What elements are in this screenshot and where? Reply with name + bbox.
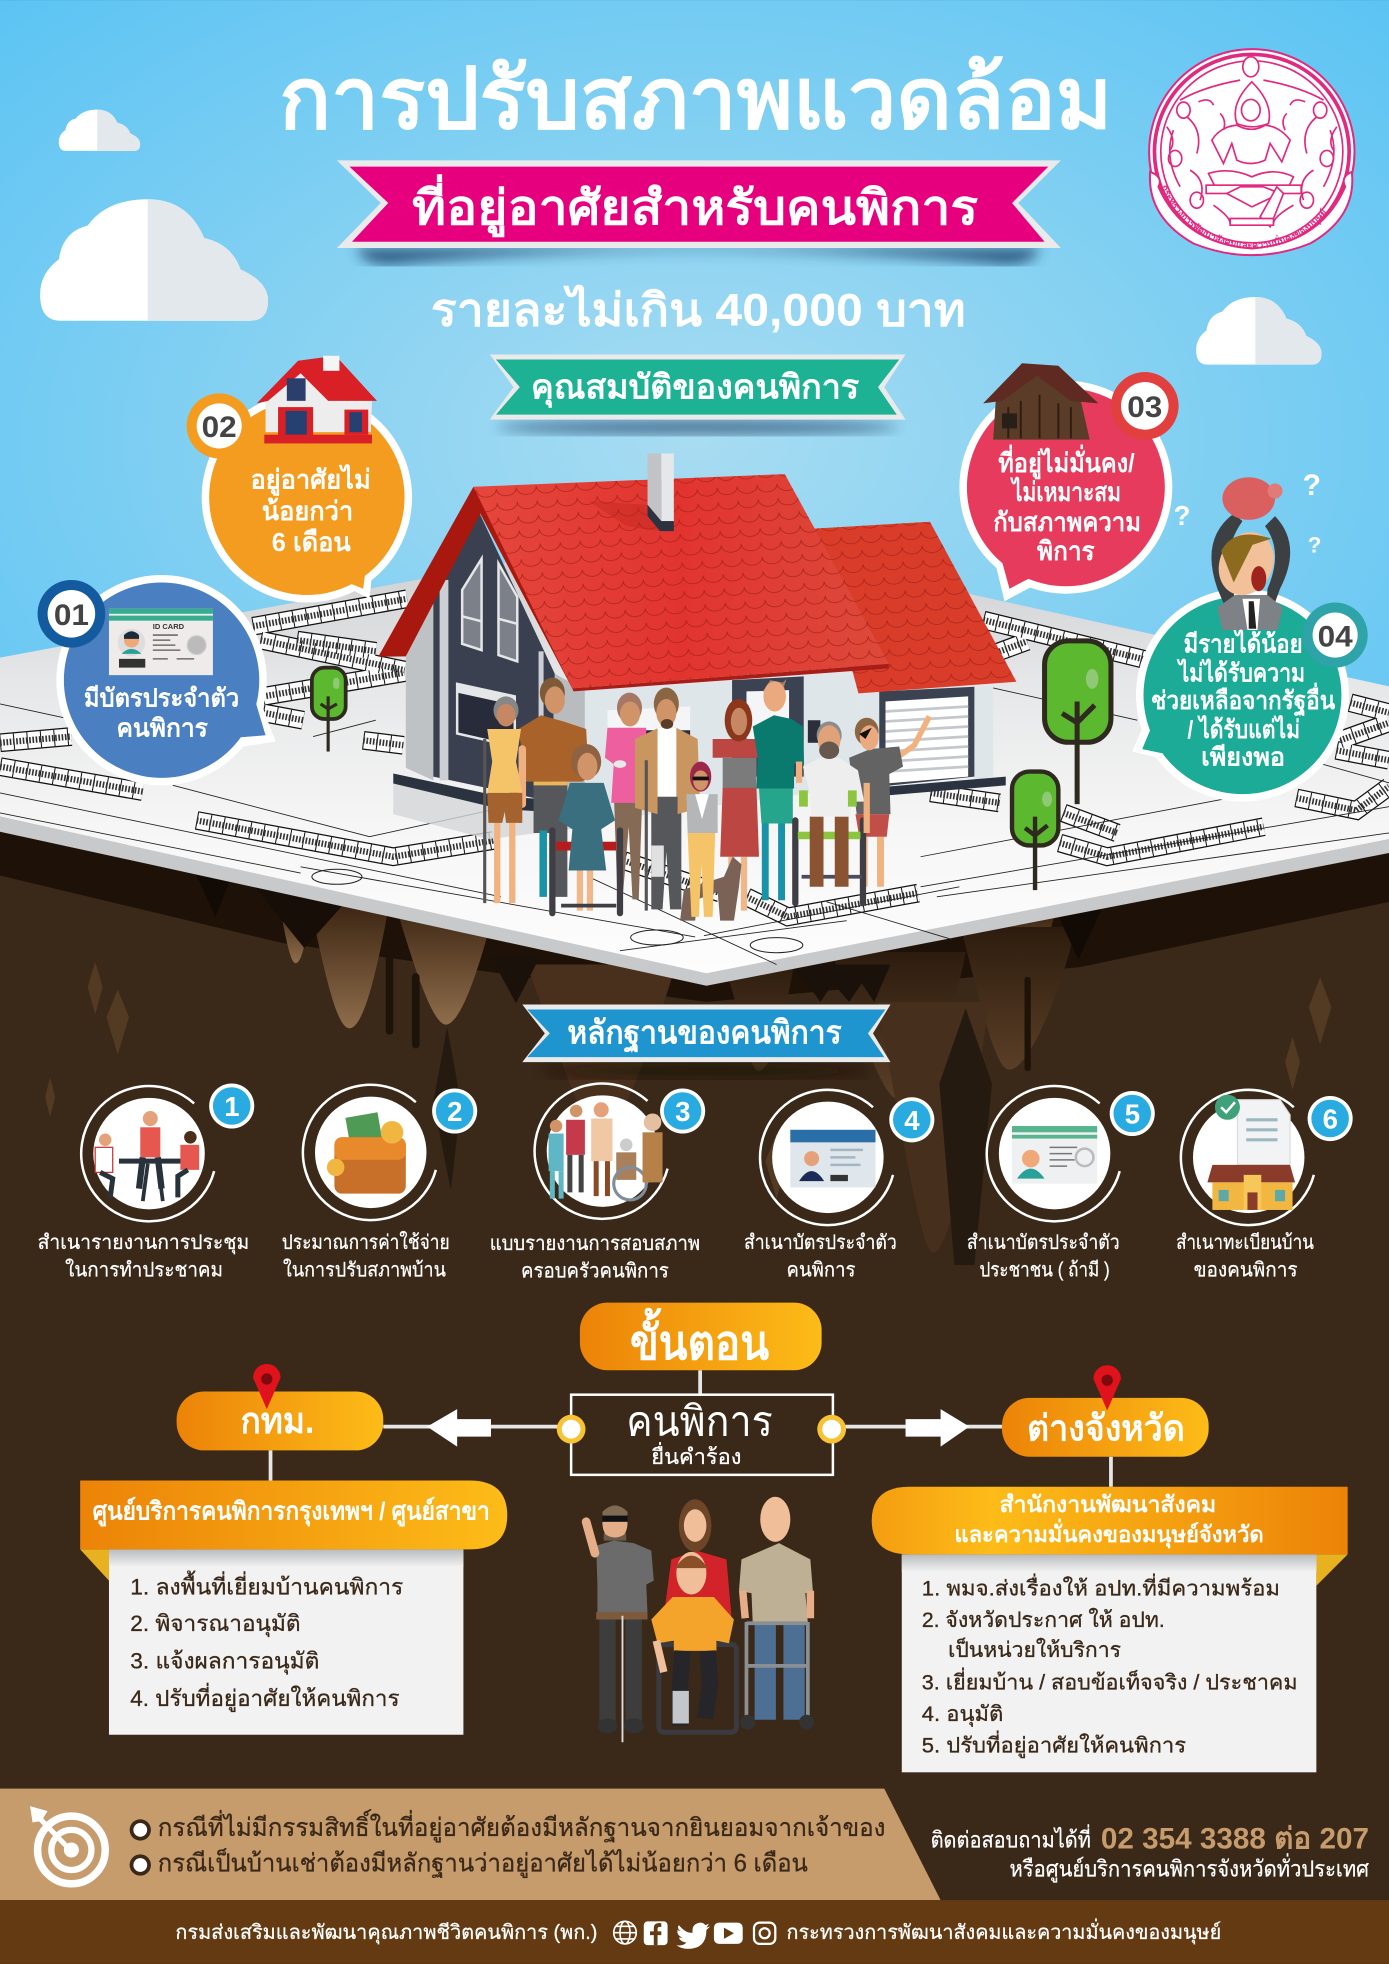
cloud right — [1196, 297, 1321, 365]
old man with walker — [739, 1497, 814, 1730]
cloud large left — [40, 199, 268, 321]
group of people with disabilities — [485, 678, 929, 921]
panel: provinces steps: 2. จังหวัดประกาศ ให้ อปท. — [922, 1608, 1165, 1632]
blueprint plate — [0, 526, 1389, 986]
evidence 1: สำเนารายงานการประชุม — [38, 1232, 249, 1255]
icon: house registration — [1207, 1095, 1295, 1210]
bubble 03 — [959, 363, 1179, 601]
box: person with disability applies: คนพิการ — [626, 1398, 773, 1444]
panel: Bangkok steps: 3. แจ้งผลการอนุมัติ — [130, 1648, 319, 1674]
bubble 01 — [38, 575, 276, 785]
badge 2 — [432, 1088, 477, 1134]
evidence 4: คนพิการ — [787, 1259, 856, 1281]
icon: twitter — [676, 1923, 710, 1949]
panel: provinces steps: 5. ปรับที่อยู่อาศัยให้คนพิการ — [922, 1730, 1186, 1758]
bubble 01: คนพิการ — [116, 715, 208, 743]
badge 03 — [1111, 372, 1179, 440]
pill: Bangkok — [177, 1392, 383, 1450]
house shadow on plate — [393, 783, 589, 839]
icon: family with disabilities — [549, 1102, 663, 1200]
tree large — [1045, 641, 1111, 804]
pill: provinces: ต่างจังหวัด — [1027, 1407, 1185, 1448]
pill: Bangkok: กทม. — [240, 1400, 314, 1441]
icon: pin right — [1093, 1365, 1121, 1410]
panel: provinces steps: 3. เยี่ยมบ้าน / สอบข้อเท็จจริง / ประชาคม — [922, 1668, 1298, 1695]
gable windows — [462, 559, 482, 650]
arrow left — [427, 1409, 491, 1447]
evidence 6 — [1176, 1090, 1353, 1281]
person 9 wheelchair — [795, 721, 868, 903]
badge 3 — [660, 1088, 705, 1134]
woman — [664, 1499, 731, 1616]
trees — [312, 641, 1111, 890]
ribbon: qualifications — [490, 355, 906, 435]
left gray wall — [406, 600, 435, 780]
evidence 3: ครอบครัวคนพิการ — [521, 1261, 669, 1283]
underground background — [0, 802, 1389, 1804]
panel: provinces steps: 1. พมจ.ส่งเรื่องให้ อปท.ที่มีความพร้อม — [922, 1574, 1280, 1601]
icon: wallet — [327, 1112, 406, 1194]
boy in wheelchair — [651, 1552, 736, 1732]
bubble 04: / ได้รับแต่ไม่ — [1187, 714, 1300, 744]
badge 3: 3 — [675, 1096, 690, 1127]
cloud small left — [59, 110, 140, 151]
ribbon: pink subtitle — [337, 160, 1061, 264]
panel: Bangkok steps: 2. พิจารณาอนุมัติ — [130, 1611, 301, 1637]
panel: Bangkok steps — [80, 1480, 507, 1735]
badge 2: 2 — [447, 1096, 462, 1127]
panel: provinces steps: เป็นหน่วยให้บริการ — [948, 1635, 1121, 1662]
badge 5: 5 — [1125, 1099, 1140, 1130]
person 5 tan jacket — [635, 688, 700, 911]
connector lines — [271, 1370, 1111, 1487]
person 3 wheelchair woman — [552, 744, 620, 913]
bubble 04 — [1132, 469, 1368, 802]
evidence 4 — [744, 1090, 934, 1281]
evidence 3 — [490, 1084, 705, 1283]
ministry seal — [1148, 48, 1356, 256]
badge 01: 01 — [54, 599, 89, 632]
evidence 2 — [282, 1085, 477, 1281]
ribbon: pink subtitle: ที่อยู่อาศัยสำหรับคนพิการ — [412, 174, 979, 238]
badge 4 — [889, 1097, 934, 1142]
pill: provinces — [1002, 1398, 1209, 1457]
bubble 03: ที่อยู่ไม่มั่นคง/ — [998, 444, 1135, 480]
panel: Bangkok steps: ศูนย์บริการคนพิการกรุงเทพฯ / ศูนย์สาขา — [93, 1496, 490, 1527]
person 8 teal — [753, 679, 804, 900]
panel: provinces steps: สำนักงานพัฒนาสังคม — [999, 1492, 1216, 1517]
bubble 02: 6 เดือน — [272, 527, 351, 557]
ribbon: qualifications: คุณสมบัติของคนพิการ — [531, 368, 859, 408]
decorative diamonds — [45, 962, 1331, 1199]
evidence 2: ในการปรับสภาพบ้าน — [283, 1258, 446, 1281]
badge 6 — [1308, 1096, 1353, 1141]
footer note panel: กรณีที่ไม่มีกรรมสิทธิ์ในที่อยู่อาศัยต้องมีหลักฐานจากยินยอมจากเจ้าของ — [158, 1809, 886, 1843]
badge 1 — [209, 1083, 254, 1129]
evidence 3: แบบรายงานการสอบสภาพ — [490, 1233, 700, 1255]
evidence 6: ของคนพิการ — [1194, 1259, 1298, 1281]
evidence 5: ประชาชน ( ถ้ามี ) — [979, 1259, 1110, 1281]
ribbon: evidence: หลักฐานของคนพิการ — [567, 1014, 842, 1053]
heading: steps: ขั้นตอน — [630, 1307, 769, 1370]
box: person with disability applies: ยื่นคำร้อง — [651, 1442, 741, 1469]
front wall — [585, 673, 858, 823]
badge 04 — [1303, 602, 1368, 668]
ribbon: evidence — [522, 1005, 891, 1078]
base — [393, 773, 589, 814]
evidence 5: สำเนาบัตรประจำตัว — [967, 1232, 1120, 1254]
arrow right — [906, 1409, 969, 1447]
panel: provinces steps: 4. อนุมัติ — [922, 1702, 1003, 1727]
person 1 crutches — [485, 696, 522, 903]
tree small — [312, 668, 346, 752]
person 2 brown shirt — [519, 678, 589, 897]
badge 02 — [187, 393, 252, 458]
contact — [931, 1823, 1370, 1882]
evidence 4: สำเนาบัตรประจำตัว — [744, 1232, 897, 1254]
gable dark wall — [433, 514, 555, 802]
main roof gable edge — [378, 487, 579, 688]
icon: id card — [1012, 1126, 1097, 1184]
ministry seal: กระทรวงการพัฒนาสังคมและความมั่นคงของมนุษย์ — [1162, 186, 1326, 249]
chimney — [648, 453, 661, 521]
badge 04: 04 — [1318, 620, 1353, 653]
evidence 1 — [38, 1083, 254, 1281]
badge 02: 02 — [202, 411, 237, 444]
icon: www — [614, 1921, 636, 1944]
panel: Bangkok steps: 4. ปรับที่อยู่อาศัยให้คนพิการ — [130, 1682, 400, 1712]
badge 03: 03 — [1127, 391, 1162, 424]
badge 1: 1 — [224, 1091, 240, 1122]
title: การปรับสภาพแวดล้อม — [279, 52, 1112, 147]
icon: man with piggy bank: ? — [1308, 532, 1321, 557]
icon: disability card — [790, 1130, 875, 1187]
badge 5 — [1110, 1091, 1155, 1136]
icon: old wooden house — [983, 363, 1098, 440]
subtitle amount: รายละไม่เกิน 40,000 บาท — [431, 284, 966, 336]
bubble 02: อยู่อาศัยไม่ — [250, 464, 371, 497]
icon: facebook — [644, 1921, 668, 1945]
right wing roof — [814, 522, 1016, 693]
badge 01 — [38, 580, 105, 648]
person 7 red dress — [713, 699, 759, 911]
bubble 04: เพียงพอ — [1201, 743, 1285, 771]
evidence 6: สำเนาทะเบียนบ้าน — [1176, 1232, 1314, 1254]
icon: man with piggy bank — [1174, 469, 1321, 630]
bubble 04: ไม่ได้รับความ — [1176, 657, 1305, 687]
stalactites — [194, 871, 1102, 1265]
bubble 02: น้อยกว่า — [262, 496, 353, 526]
icon: target — [30, 1806, 105, 1884]
icon: youtube — [714, 1923, 743, 1944]
icon: instagram — [754, 1923, 775, 1944]
footer bar: กรมส่งเสริมและพัฒนาคุณภาพชีวิตคนพิการ (พก.) — [175, 1922, 597, 1945]
person 6 blind woman with guide dog — [680, 762, 741, 921]
icon: pin left — [253, 1364, 281, 1409]
group of three people with wheelchair — [586, 1497, 814, 1742]
badge 6: 6 — [1323, 1104, 1338, 1135]
gray side by front wall — [551, 674, 585, 802]
bubble 04: มีรายได้น้อย — [1184, 629, 1303, 659]
footer note panel: กรณีเป็นบ้านเช่าต้องมีหลักฐานว่าอยู่อาศัยได้ไม่น้อยกว่า 6 เดือน — [158, 1847, 808, 1878]
evidence 5 — [967, 1086, 1155, 1281]
icon: meeting — [95, 1111, 199, 1201]
heading: steps — [580, 1303, 822, 1370]
box: person with disability applies — [557, 1395, 846, 1475]
right wing wall — [858, 691, 879, 789]
footer note panel — [0, 1789, 941, 1900]
blueprint lines — [0, 599, 1389, 964]
icon: man with piggy bank: ? — [1174, 500, 1190, 531]
bubble 03: พิการ — [1037, 536, 1095, 566]
person 4 pink woman — [605, 693, 646, 899]
evidence 2: ประมาณการค่าใช้จ่าย — [282, 1231, 450, 1254]
bubble 03: ไม่เหมาะสม — [1010, 476, 1121, 507]
footer bar: กระทรวงการพัฒนาสังคมและความมั่นคงของมนุษย์ — [787, 1918, 1221, 1945]
sky background — [0, 0, 1389, 877]
icon: id card: ID CARD — [153, 622, 185, 631]
person 10 waving — [849, 716, 929, 887]
man with cane — [586, 1506, 654, 1742]
bubble 04: ช่วยเหลือจากรัฐอื่น — [1151, 682, 1335, 717]
icon: man with piggy bank: ? — [1303, 469, 1321, 502]
bubble 02 — [187, 356, 412, 602]
bubble 03: กับสภาพความ — [993, 507, 1141, 537]
panel: provinces steps: และความมั่นคงของมนุษย์จังหวัด — [954, 1518, 1264, 1549]
bubble 01: มีบัตรประจำตัว — [84, 684, 239, 712]
icon: id card — [109, 609, 213, 675]
house — [378, 453, 1016, 839]
contact: 02 354 3388 ต่อ 207 — [1101, 1823, 1369, 1856]
panel: Bangkok steps: 1. ลงพื้นที่เยี่ยมบ้านคนพิการ — [130, 1570, 403, 1599]
contact: ติดต่อสอบถามได้ที่ — [931, 1823, 1091, 1852]
main roof — [473, 474, 889, 688]
badge 4: 4 — [904, 1105, 920, 1136]
evidence 1: ในการทำประชาคม — [65, 1258, 223, 1281]
footer bar — [0, 1900, 1389, 1964]
panel: provinces steps — [872, 1487, 1348, 1772]
icon: red house — [257, 356, 377, 443]
tree medium — [1012, 772, 1058, 890]
